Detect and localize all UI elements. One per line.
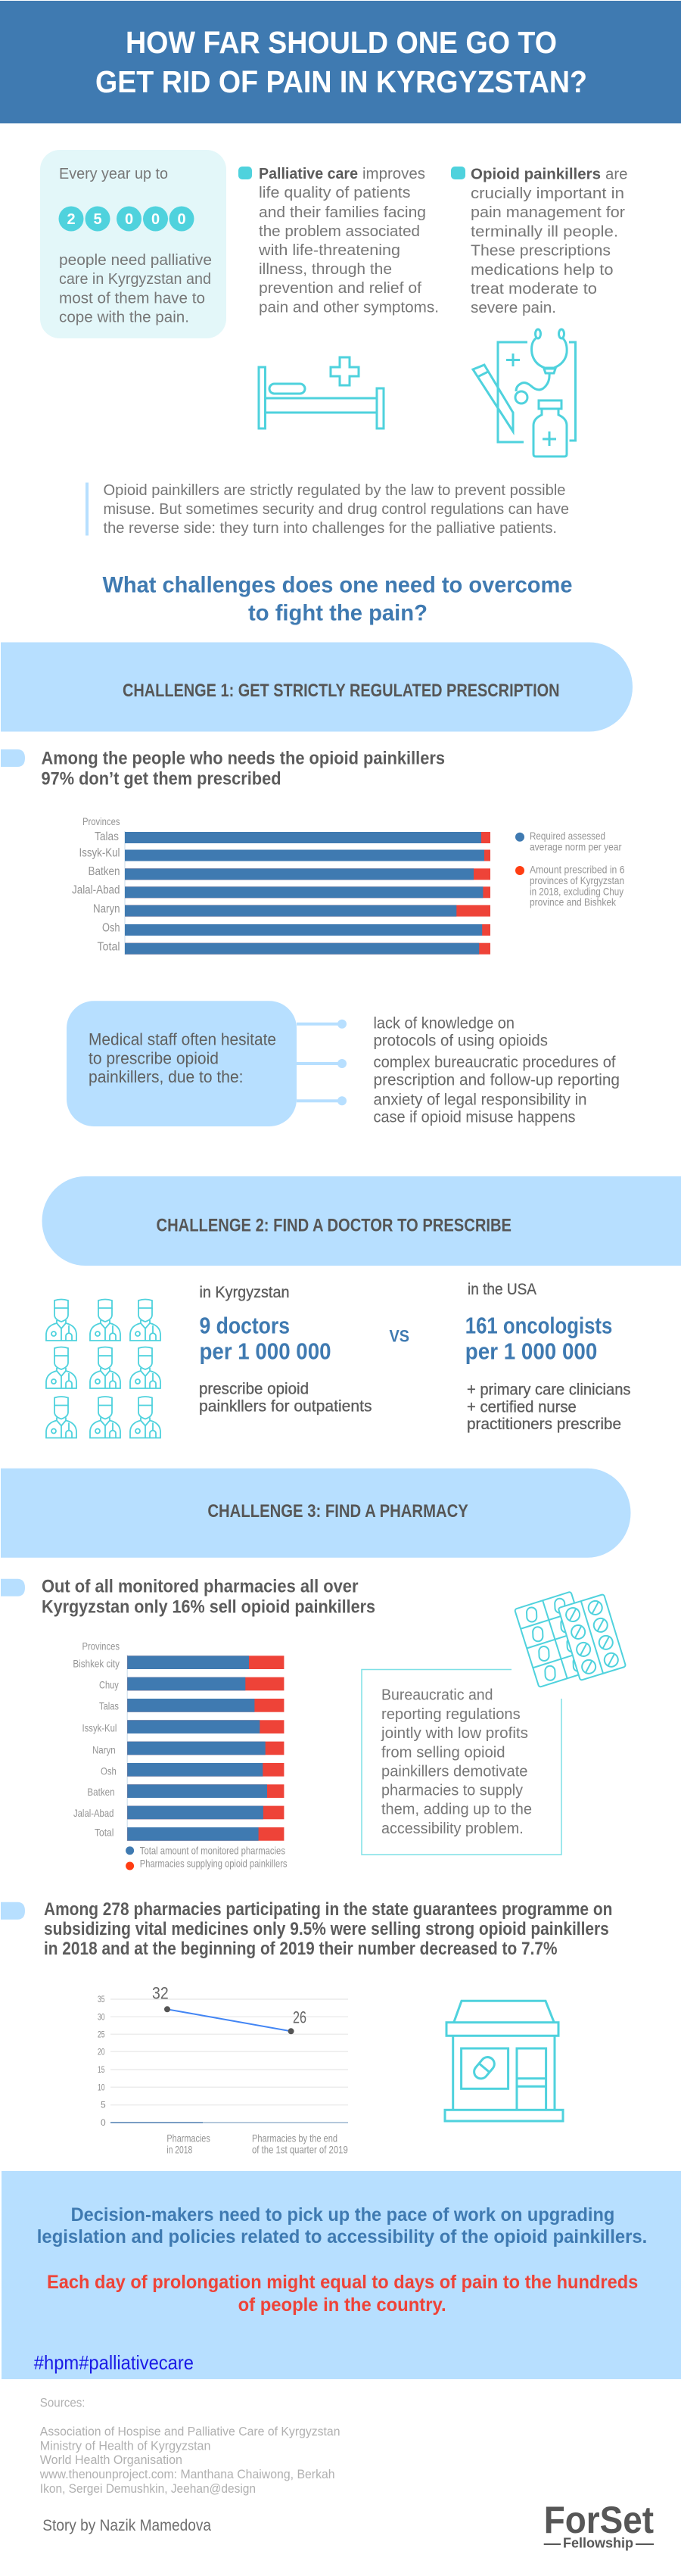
subheading: 97% not prescribed: 97% don’t get them prescribed bbox=[41, 769, 281, 789]
subheading: 278 pharmacies: Among 278 pharmacies participating in the state guarantees programme on bbox=[44, 1899, 612, 1920]
province labels bbox=[72, 830, 120, 954]
logo: ForSet Fellowship: ForSet bbox=[544, 2499, 654, 2541]
number badges 25 000 bbox=[59, 206, 194, 232]
y axis labels: 5 bbox=[101, 2100, 106, 2110]
story byline: Story by Nazik Mamedova bbox=[42, 2517, 211, 2534]
message to decision-makers bbox=[37, 2204, 647, 2247]
legend: Required assessed bbox=[530, 830, 605, 842]
text block: palliative care: Palliative care bbox=[259, 166, 358, 182]
icon: hospital bed bbox=[259, 357, 384, 428]
stat description: care in Kyrgyzstan and bbox=[59, 271, 211, 288]
province labels: Talas bbox=[95, 830, 119, 843]
heading: what challenges: What challenges does one need to overcome bbox=[103, 572, 572, 598]
comparison: USA: per 1 000 000 bbox=[465, 1338, 597, 1365]
comparison: USA: + primary care clinicians bbox=[467, 1381, 631, 1399]
x axis labels: of the 1st quarter of 2019 bbox=[252, 2144, 348, 2156]
data label 26: 26 bbox=[293, 2008, 306, 2026]
legend bbox=[126, 1844, 288, 1870]
message to decision-makers: legislation and policies related to accessibility of the opioid painkillers. bbox=[37, 2226, 647, 2247]
panel: medical staff hesitation: to prescribe opioid bbox=[89, 1048, 219, 1067]
text block: opioid painkillers: These prescriptions bbox=[471, 242, 611, 259]
y axis labels: 35 bbox=[98, 1994, 105, 2004]
y axis labels: 0 bbox=[101, 2117, 106, 2128]
message to decision-makers: Decision-makers need to pick up the pace of work on upgrading bbox=[71, 2204, 614, 2226]
vs label: VS bbox=[389, 1326, 409, 1345]
comparison: USA bbox=[465, 1281, 631, 1433]
text block: opioid painkillers: are bbox=[605, 167, 628, 183]
sources: Association of Hospise and Palliative Care of Kyrgyzstan bbox=[40, 2424, 340, 2438]
subheading: 16% sell opioids: Kyrgyzstan only 16% sell opioid painkillers bbox=[42, 1597, 375, 1618]
subheading: 16% sell opioids: Out of all monitored pharmacies all over bbox=[42, 1576, 359, 1596]
bars bbox=[127, 1656, 284, 1841]
province labels: Osh bbox=[102, 922, 120, 935]
subheading: 278 pharmacies bbox=[1, 1899, 612, 1959]
number badges 25 000: 5 bbox=[93, 211, 102, 228]
text block: palliative care: pain and other symptoms. bbox=[259, 300, 439, 316]
text block: opioid painkillers: crucially important in bbox=[471, 185, 624, 202]
icon: blister packs of pills bbox=[515, 1592, 626, 1687]
stat description: most of them have to bbox=[59, 291, 205, 307]
comparison: Kyrgyzstan: painkllers for outpatients bbox=[199, 1397, 372, 1415]
y axis labels: 20 bbox=[98, 2046, 105, 2057]
text block: opioid painkillers: terminally ill people. bbox=[471, 224, 618, 241]
quote: regulation note bbox=[86, 482, 569, 537]
panel: medical staff hesitation: Medical staff often hesitate bbox=[89, 1030, 276, 1049]
heading: what challenges bbox=[103, 572, 572, 625]
province labels: Bishkek city bbox=[73, 1657, 120, 1669]
text block: opioid painkillers bbox=[451, 167, 628, 316]
callout: bureaucratic regulations: them, adding up to the bbox=[381, 1802, 532, 1818]
subheading: 97% not prescribed bbox=[1, 748, 445, 789]
reasons list: complex bureaucratic procedures of bbox=[374, 1054, 616, 1071]
panel: medical staff hesitation: painkillers, due to the: bbox=[89, 1067, 244, 1086]
number badges 25 000: 0 bbox=[177, 211, 186, 228]
text block: palliative care bbox=[238, 166, 439, 316]
callout: bureaucratic regulations: accessibility problem. bbox=[381, 1821, 524, 1837]
text block: palliative care: illness, through the bbox=[259, 261, 392, 278]
province labels: Chuy bbox=[99, 1679, 119, 1691]
axis title: Provinces bbox=[82, 1640, 120, 1652]
challenge 1 banner: CHALLENGE 1: GET STRICTLY REGULATED PRESCRIPTION bbox=[123, 681, 560, 701]
comparison: Kyrgyzstan: 9 doctors bbox=[200, 1313, 290, 1339]
province labels bbox=[73, 1657, 120, 1839]
icon: pharmacy building bbox=[445, 2001, 563, 2121]
number badges 25 000: 2 bbox=[67, 211, 76, 228]
title: GET RID OF PAIN IN KYRGYZSTAN? bbox=[95, 64, 587, 99]
text block: palliative care: the problem associated bbox=[259, 223, 420, 240]
panel: medical staff hesitation bbox=[67, 1001, 297, 1126]
legend: Pharmacies supplying opioid painkillers bbox=[140, 1858, 288, 1870]
text block: palliative care: and their families facing bbox=[259, 204, 426, 221]
stat intro: Every year up to bbox=[59, 166, 168, 182]
legend: Amount prescribed in 6 bbox=[530, 864, 625, 876]
callout: bureaucratic regulations: painkillers demotivate bbox=[381, 1763, 528, 1780]
text block: opioid painkillers: severe pain. bbox=[471, 300, 556, 316]
province labels: Osh bbox=[101, 1765, 117, 1777]
challenge 3 banner bbox=[1, 1469, 631, 1558]
data label 32: 32 bbox=[152, 1983, 169, 2002]
y axis labels: 15 bbox=[98, 2064, 105, 2075]
data line bbox=[167, 2009, 291, 2031]
quote: regulation note: the reverse side: they turn into challenges for the palliative patients. bbox=[103, 520, 557, 537]
title: HOW FAR SHOULD ONE GO TO bbox=[126, 25, 557, 60]
legend: average norm per year bbox=[530, 840, 622, 852]
reasons list: prescription and follow-up reporting bbox=[374, 1072, 620, 1089]
comparison: Kyrgyzstan: in Kyrgyzstan bbox=[200, 1284, 289, 1301]
reasons list: case if opioid misuse happens bbox=[374, 1109, 575, 1126]
province labels: Issyk-Kul bbox=[79, 847, 120, 860]
text block: palliative care: improves bbox=[362, 166, 425, 182]
text block: opioid painkillers: medications help to bbox=[471, 262, 613, 279]
province labels: Talas bbox=[99, 1700, 119, 1712]
x axis labels: in 2018 bbox=[166, 2144, 192, 2156]
hashtags: #hpm#palliativecare bbox=[34, 2351, 194, 2374]
line chart: pharmacies 2018-2019 bbox=[98, 1983, 348, 2156]
comparison: USA: 161 oncologists bbox=[465, 1313, 612, 1339]
subheading: 16% sell opioids bbox=[1, 1576, 375, 1618]
challenge 3 banner: CHALLENGE 3: FIND A PHARMACY bbox=[207, 1501, 468, 1522]
comparison: USA: in the USA bbox=[468, 1281, 536, 1298]
y axis labels bbox=[98, 1994, 106, 2128]
challenge 2 banner: CHALLENGE 2: FIND A DOCTOR TO PRESCRIBE bbox=[156, 1216, 512, 1236]
quote: regulation note: misuse. But sometimes security and drug control regulations can have bbox=[103, 501, 569, 518]
province labels: Total bbox=[97, 941, 120, 954]
legend: Total amount of monitored pharmacies bbox=[140, 1844, 285, 1856]
province labels: Batken bbox=[88, 865, 120, 878]
logo: ForSet Fellowship: Fellowship bbox=[563, 2536, 633, 2551]
icons: nine doctors bbox=[46, 1299, 160, 1438]
comparison: USA: practitioners prescribe bbox=[467, 1416, 621, 1433]
red warning: Each day of prolongation might equal to days of pain to the hundreds bbox=[47, 2272, 638, 2293]
x axis labels bbox=[166, 2132, 348, 2156]
sources bbox=[39, 2396, 340, 2496]
panel: call to action bbox=[2, 2171, 681, 2379]
reasons list: anxiety of legal responsibility in bbox=[374, 1091, 587, 1108]
text block: opioid painkillers: treat moderate to bbox=[471, 281, 597, 297]
stat description: people need palliative bbox=[59, 252, 212, 269]
legend bbox=[515, 830, 625, 908]
province labels: Batken bbox=[87, 1786, 115, 1798]
comparison: Kyrgyzstan: prescribe opioid bbox=[199, 1381, 309, 1398]
reasons list bbox=[374, 1014, 620, 1126]
subheading: 278 pharmacies: subsidizing vital medicines only 9.5% were selling strong opioid painkillers bbox=[44, 1919, 609, 1939]
x axis labels: Pharmacies bbox=[166, 2132, 210, 2144]
text block: opioid painkillers: Opioid painkillers bbox=[471, 167, 601, 183]
callout: bureaucratic regulations: from selling opioid bbox=[381, 1744, 505, 1761]
title bbox=[95, 25, 587, 99]
province labels: Jalal-Abad bbox=[72, 884, 120, 897]
callout: bureaucratic regulations: reporting regulations bbox=[381, 1706, 521, 1723]
sources: Sources: bbox=[40, 2396, 85, 2410]
axis title: Provinces bbox=[82, 815, 120, 827]
subheading: 97% not prescribed: Among the people who needs the opioid painkillers bbox=[41, 748, 445, 769]
number badges 25 000: 0 bbox=[125, 211, 133, 228]
red warning bbox=[47, 2272, 638, 2316]
callout: bureaucratic regulations: pharmacies to supply bbox=[381, 1783, 523, 1799]
bar chart: prescribed opioids by province bbox=[72, 815, 625, 955]
province labels: Naryn bbox=[92, 1743, 116, 1755]
callout: bureaucratic regulations: Bureaucratic and bbox=[381, 1687, 493, 1704]
x axis labels: Pharmacies by the end bbox=[252, 2132, 337, 2144]
text block: opioid painkillers: pain management for bbox=[471, 204, 625, 221]
header banner bbox=[0, 1, 681, 123]
sources: Ministry of Health of Kyrgyzstan bbox=[40, 2438, 210, 2453]
number badges 25 000: 0 bbox=[151, 211, 160, 228]
reasons list: protocols of using opioids bbox=[374, 1033, 548, 1050]
comparison: USA: + certified nurse bbox=[467, 1398, 577, 1416]
subheading: 278 pharmacies: in 2018 and at the beginning of 2019 their number decreased to 7.7% bbox=[44, 1939, 557, 1959]
text block: palliative care: life quality of patients bbox=[259, 185, 410, 201]
panel: 25 000 people stat bbox=[40, 150, 226, 338]
connectors to reasons bbox=[297, 1020, 347, 1105]
y axis labels: 30 bbox=[98, 2011, 105, 2022]
sources: www.thenounproject.com: Manthana Chaiwong, Berkah bbox=[39, 2467, 335, 2481]
province labels: Total bbox=[95, 1827, 114, 1839]
y axis labels: 25 bbox=[98, 2029, 105, 2039]
y axis labels: 10 bbox=[98, 2082, 105, 2092]
province labels: Jalal-Abad bbox=[73, 1807, 114, 1819]
bar chart: pharmacies by province bbox=[73, 1640, 288, 1870]
stat description bbox=[59, 252, 212, 326]
icon: clipboard, stethoscope, pencil and medicine bottle bbox=[473, 329, 575, 456]
challenge 1 banner bbox=[1, 642, 633, 731]
comparison: Kyrgyzstan: per 1 000 000 bbox=[200, 1338, 331, 1365]
reasons list: lack of knowledge on bbox=[374, 1014, 515, 1032]
heading: what challenges: to fight the pain? bbox=[248, 601, 428, 625]
stat description: cope with the pain. bbox=[59, 309, 189, 326]
legend: in 2018, excluding Chuy bbox=[530, 885, 623, 897]
legend: provinces of Kyrgyzstan bbox=[530, 874, 624, 886]
text block: palliative care: prevention and relief of bbox=[259, 280, 421, 297]
comparison: Kyrgyzstan bbox=[199, 1284, 372, 1415]
challenge 2 banner bbox=[42, 1176, 681, 1266]
callout: bureaucratic regulations bbox=[362, 1670, 561, 1855]
red warning: of people in the country. bbox=[238, 2294, 446, 2316]
province labels: Issyk-Kul bbox=[82, 1722, 117, 1734]
legend: province and Bishkek bbox=[530, 896, 617, 908]
text block: palliative care: with life-threatening bbox=[258, 242, 400, 259]
sources: World Health Organisation bbox=[40, 2453, 182, 2467]
province labels: Naryn bbox=[93, 902, 120, 915]
quote: regulation note: Opioid painkillers are strictly regulated by the law to prevent possible bbox=[103, 482, 565, 499]
callout: bureaucratic regulations: jointly with low profits bbox=[381, 1725, 528, 1742]
bars bbox=[125, 832, 490, 955]
sources: Ikon, Sergei Demushkin, Jeehan@design bbox=[40, 2481, 256, 2496]
